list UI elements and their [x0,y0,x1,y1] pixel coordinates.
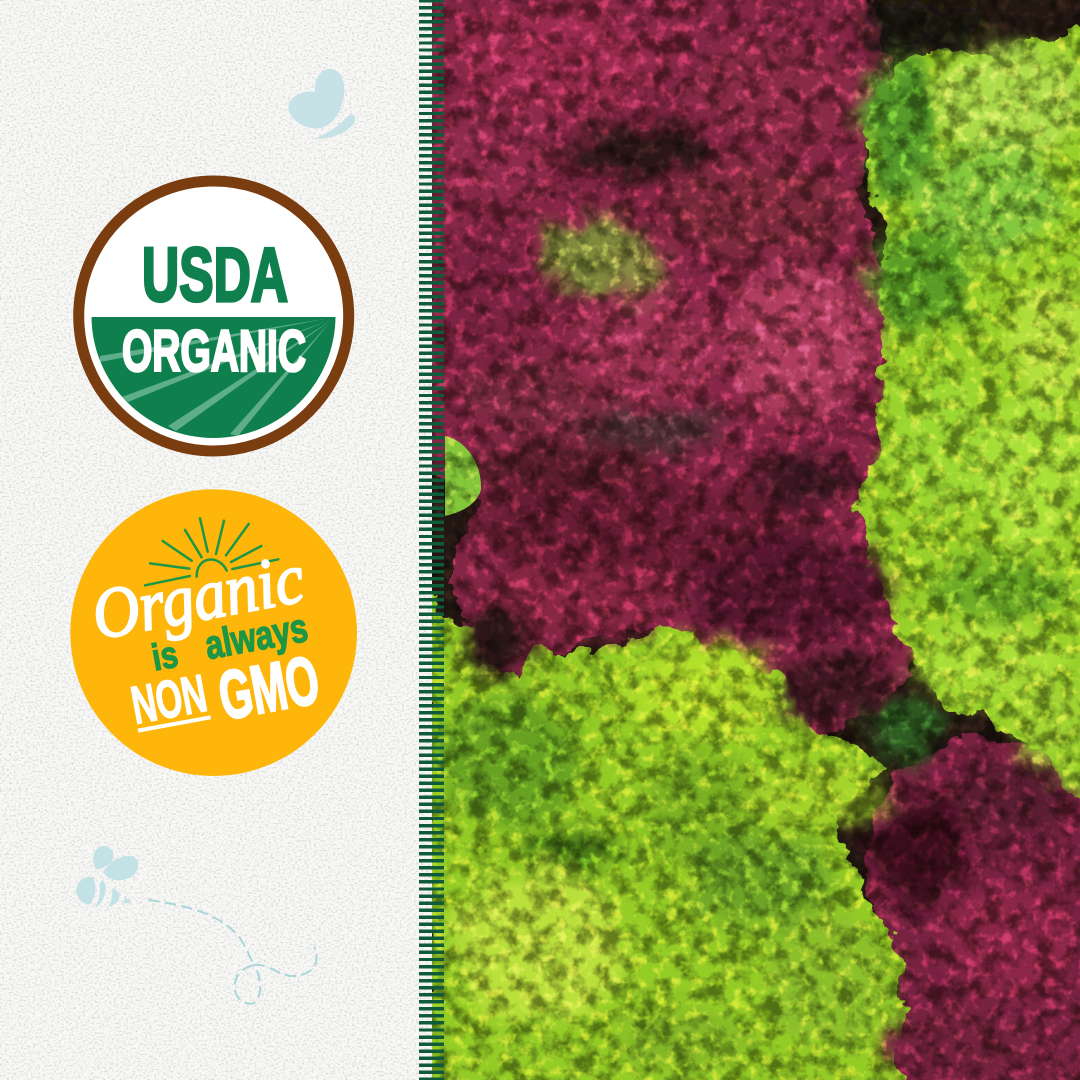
text: always: always [201,604,311,668]
text: USDA: USDA [142,233,288,318]
text: GMO: GMO [213,642,325,735]
panel: lettuce photograph [432,0,1080,1080]
text: NON: NON [127,664,211,736]
badge: USDA Organic seal [73,176,354,456]
text: ORGANIC: ORGANIC [122,319,306,384]
text: Organic: Organic [86,538,310,655]
text: is: is [148,633,181,679]
striped vertical border [419,0,444,1080]
icon: sun with rays [145,518,278,585]
underline [138,717,211,731]
small green leaf at left edge [445,436,481,516]
